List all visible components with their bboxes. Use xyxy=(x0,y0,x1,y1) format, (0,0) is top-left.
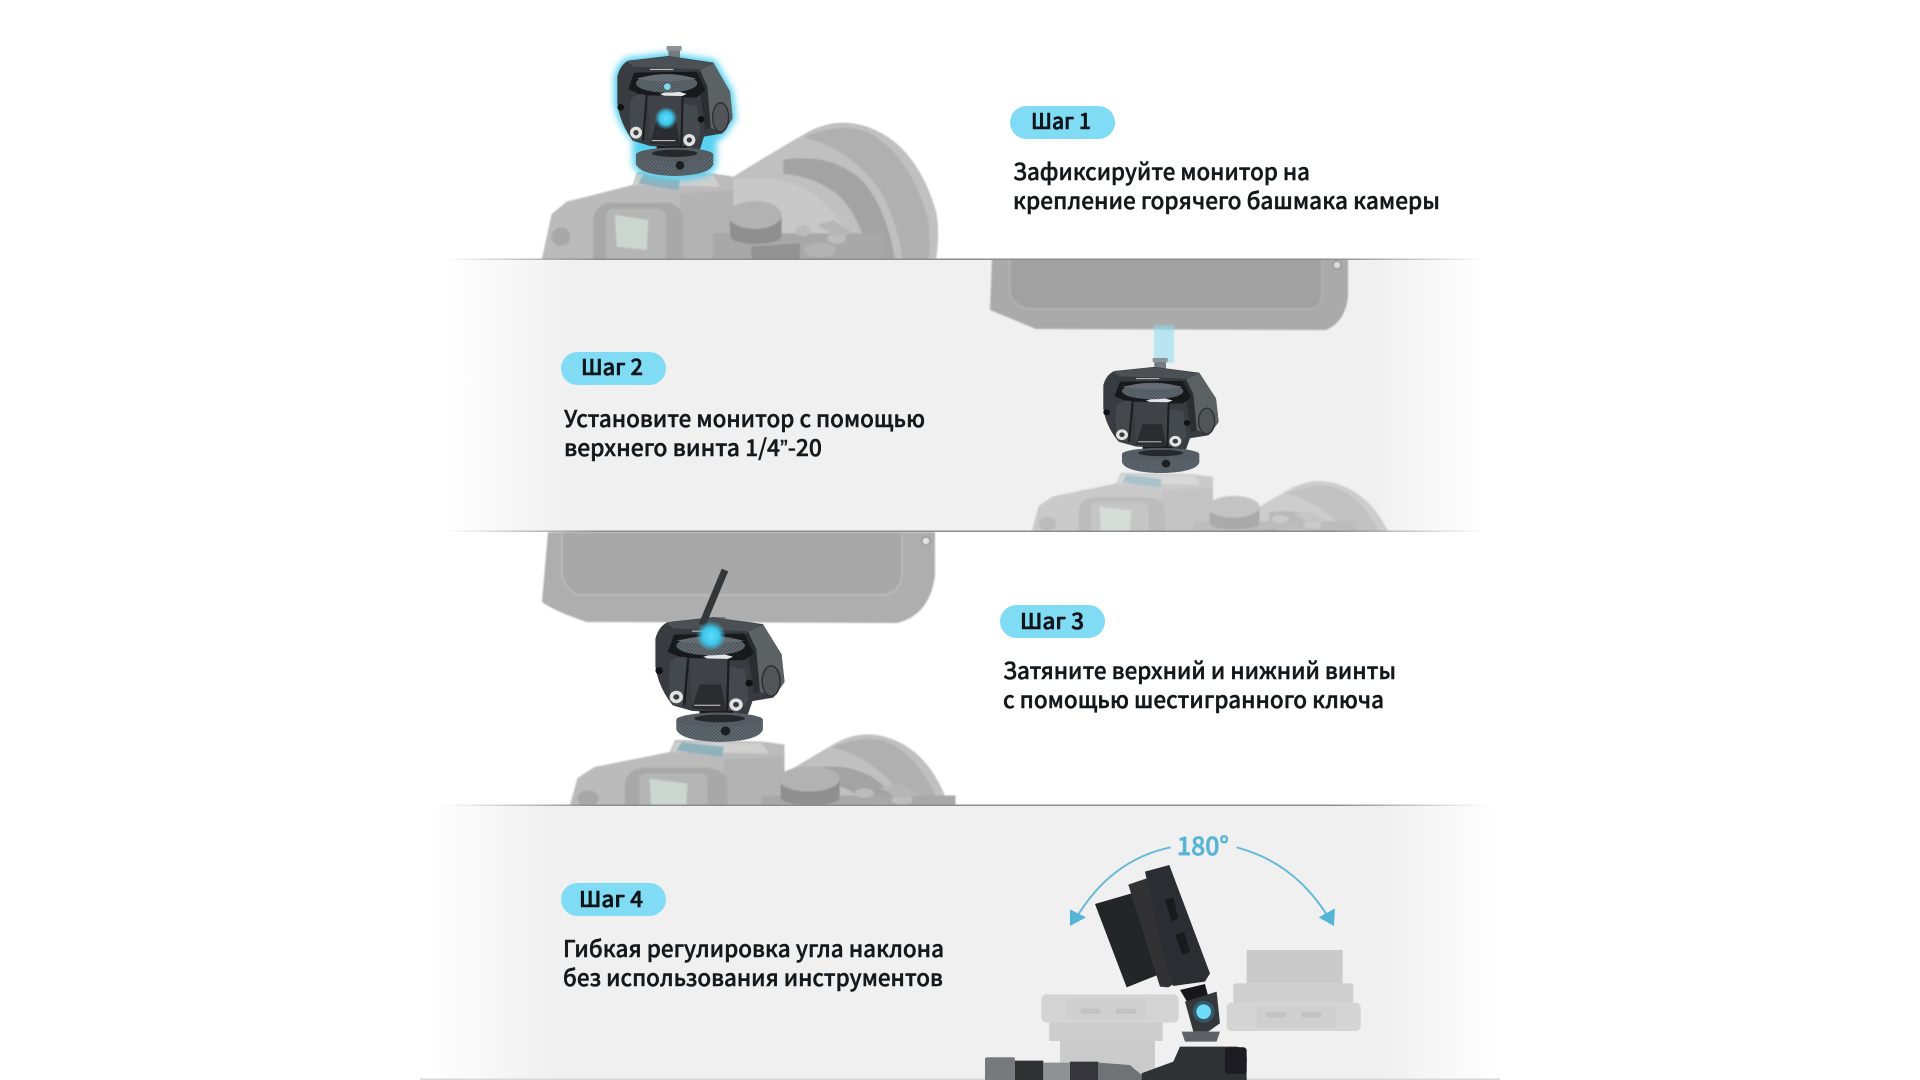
step 3 badge: Шаг 3 xyxy=(1020,604,1084,636)
step 2 description: верхнего винта 1/4”-20 xyxy=(564,429,822,463)
step 4 description: Гибкая регулировка угла наклона xyxy=(563,930,944,964)
camera body and lens xyxy=(985,1047,1247,1080)
tilted monitor xyxy=(1095,865,1210,1007)
step 2 description: Установите монитор с помощью xyxy=(564,400,925,434)
step 2 description xyxy=(564,400,925,463)
photo: monitor tilting 180 degrees on mount xyxy=(985,827,1361,1080)
step 4 badge xyxy=(561,882,666,916)
ghost monitor right xyxy=(1227,950,1361,1031)
step 3 badge xyxy=(1000,604,1105,638)
photo: camera with mount on hot shoe, highlighted xyxy=(541,46,939,259)
panel: step 1 xyxy=(541,46,1438,259)
step 4 description xyxy=(563,930,944,993)
panel: step 4 xyxy=(420,804,1500,1080)
ghost monitor left xyxy=(1041,994,1179,1080)
photo: mount under monitor with hex key xyxy=(542,532,956,882)
step 2 badge xyxy=(561,350,666,385)
step 3 description: Затяните верхний и нижний винты xyxy=(1003,652,1396,686)
step 1 description: Зафиксируйте монитор на xyxy=(1013,153,1310,187)
mount joint xyxy=(1182,992,1220,1042)
infographic canvas xyxy=(420,46,1500,1080)
panel: step 3 xyxy=(445,530,1485,882)
step 3 description xyxy=(1003,652,1396,715)
180 degree label: 180° xyxy=(1177,827,1229,863)
arrowheads xyxy=(1070,908,1335,926)
step 1 badge: Шаг 1 xyxy=(1031,104,1091,136)
panel: step 2 xyxy=(454,258,1476,531)
step 1 description xyxy=(1013,153,1440,216)
step 2 badge: Шаг 2 xyxy=(581,350,643,382)
step 3 description: с помощью шестигранного ключа xyxy=(1003,681,1384,715)
step 4 badge: Шаг 4 xyxy=(579,882,643,914)
step 4 description: без использования инструментов xyxy=(563,959,943,993)
step 1 badge xyxy=(1010,104,1115,139)
photo: monitor above mount with camera xyxy=(989,260,1388,531)
rotation arcs xyxy=(1075,847,1330,920)
step 1 description: крепление горячего башмака камеры xyxy=(1013,182,1440,216)
